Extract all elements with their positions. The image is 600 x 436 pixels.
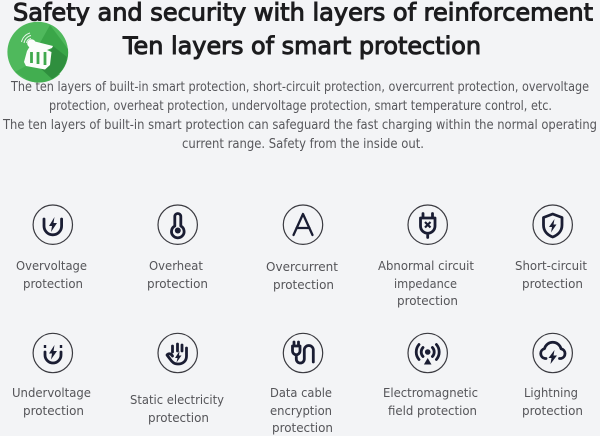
item: overvoltage protection: protection <box>23 277 83 292</box>
title <box>13 0 593 60</box>
body text <box>2 80 597 152</box>
item: undervoltage protection: Undervoltage <box>12 386 91 401</box>
item: abnormal circuit impedance protection <box>378 205 474 309</box>
item: abnormal circuit impedance protection: impedance <box>394 277 457 292</box>
title: Ten layers of smart protection <box>122 32 481 60</box>
item: data cable encryption protection: Data cable <box>270 386 332 401</box>
item: electromagnetic field protection: Electromagnetic <box>383 386 478 401</box>
item: undervoltage protection <box>12 333 91 419</box>
item: overcurrent protection: Overcurrent <box>266 260 338 275</box>
item: lightning protection <box>522 333 583 419</box>
item: lightning protection: Lightning <box>524 386 578 401</box>
item: electromagnetic field protection <box>383 333 478 419</box>
item: short-circuit protection: Short-circuit <box>515 259 587 274</box>
item: overheat protection: Overheat <box>149 259 203 274</box>
item: short-circuit protection <box>515 205 587 292</box>
item: overcurrent protection <box>266 205 338 293</box>
item: static electricity protection: protection <box>148 411 209 426</box>
item: static electricity protection <box>130 333 224 426</box>
item: abnormal circuit impedance protection: Abnormal circuit <box>378 259 474 274</box>
item: overvoltage protection: Overvoltage <box>16 259 87 274</box>
item: undervoltage protection: protection <box>23 404 84 419</box>
item: overcurrent protection: protection <box>273 278 334 293</box>
item: overvoltage protection <box>16 205 87 292</box>
item: short-circuit protection: protection <box>522 277 583 292</box>
body text: current range. Safety from the inside out. <box>182 137 424 152</box>
item: data cable encryption protection: encryption <box>270 404 332 419</box>
item: overheat protection: protection <box>147 277 208 292</box>
item: data cable encryption protection: protection <box>272 421 333 436</box>
item: lightning protection: protection <box>522 404 583 419</box>
item: static electricity protection: Static electricity <box>130 393 224 408</box>
item: overheat protection <box>147 205 208 292</box>
item: abnormal circuit impedance protection: protection <box>397 294 458 309</box>
icon: green logo badge <box>7 22 68 83</box>
item: electromagnetic field protection: field protection <box>388 404 477 419</box>
item: data cable encryption protection <box>270 333 333 436</box>
